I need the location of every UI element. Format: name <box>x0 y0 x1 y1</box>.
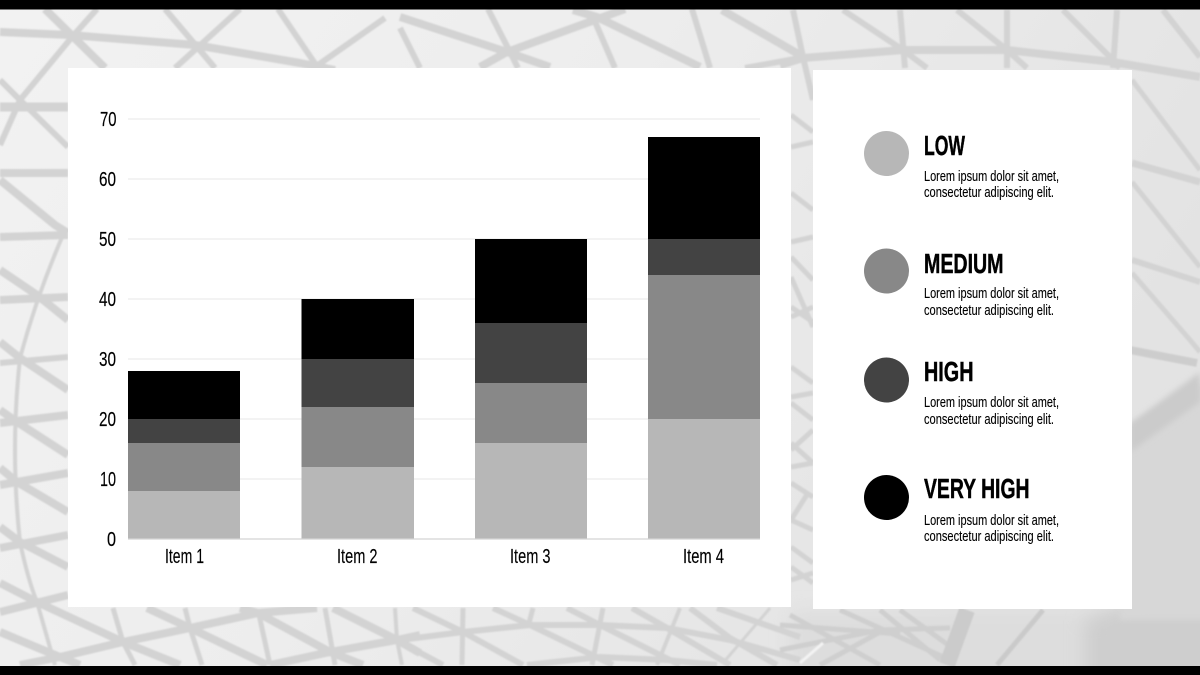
y axis labels: 0 <box>107 529 116 551</box>
legend item: low <box>864 130 1059 201</box>
top black bar <box>0 0 1200 10</box>
legend item: medium <box>864 248 1059 319</box>
stacked bar chart <box>99 109 760 568</box>
bar: Item 3 <box>475 239 587 539</box>
bar: Item 2 <box>302 299 414 539</box>
legend item: very high: Lorem ipsum dolor sit amet, <box>924 512 1059 529</box>
y axis labels: 20 <box>99 409 116 431</box>
y axis labels: 70 <box>100 109 116 131</box>
panel: legend background <box>813 70 1132 609</box>
legend item: low: consectetur adipiscing elit. <box>924 184 1054 201</box>
legend item: high: Lorem ipsum dolor sit amet, <box>924 394 1059 411</box>
legend item: low: LOW <box>924 130 965 161</box>
legend item: low: Lorem ipsum dolor sit amet, <box>924 168 1059 185</box>
legend item: medium: consectetur adipiscing elit. <box>924 302 1054 319</box>
x axis labels: Item 4 <box>683 546 724 568</box>
x axis line <box>128 538 760 540</box>
y axis labels: 60 <box>99 169 116 191</box>
legend item: high <box>864 356 1059 428</box>
y axis labels: 40 <box>99 289 116 311</box>
legend item: very high <box>864 473 1059 545</box>
legend item: high: consectetur adipiscing elit. <box>924 411 1054 428</box>
y axis labels: 30 <box>99 349 116 371</box>
bar: Item 1 <box>128 371 240 539</box>
x axis labels <box>165 546 724 568</box>
grid lines <box>128 119 760 479</box>
bottom black bar <box>0 666 1200 675</box>
y axis labels: 50 <box>99 229 116 251</box>
x axis labels: Item 1 <box>165 546 204 568</box>
x axis labels: Item 2 <box>337 546 378 568</box>
x axis labels: Item 3 <box>510 546 550 568</box>
legend item: medium: MEDIUM <box>924 248 1004 279</box>
legend item: medium: Lorem ipsum dolor sit amet, <box>924 285 1059 302</box>
legend item: very high: consectetur adipiscing elit. <box>924 528 1054 545</box>
legend item: high: HIGH <box>924 356 974 387</box>
y axis labels <box>99 109 116 551</box>
y axis labels: 10 <box>100 469 116 491</box>
legend item: very high: VERY HIGH <box>924 473 1030 504</box>
bar: Item 4 <box>648 137 760 539</box>
panel: chart background <box>68 68 791 607</box>
